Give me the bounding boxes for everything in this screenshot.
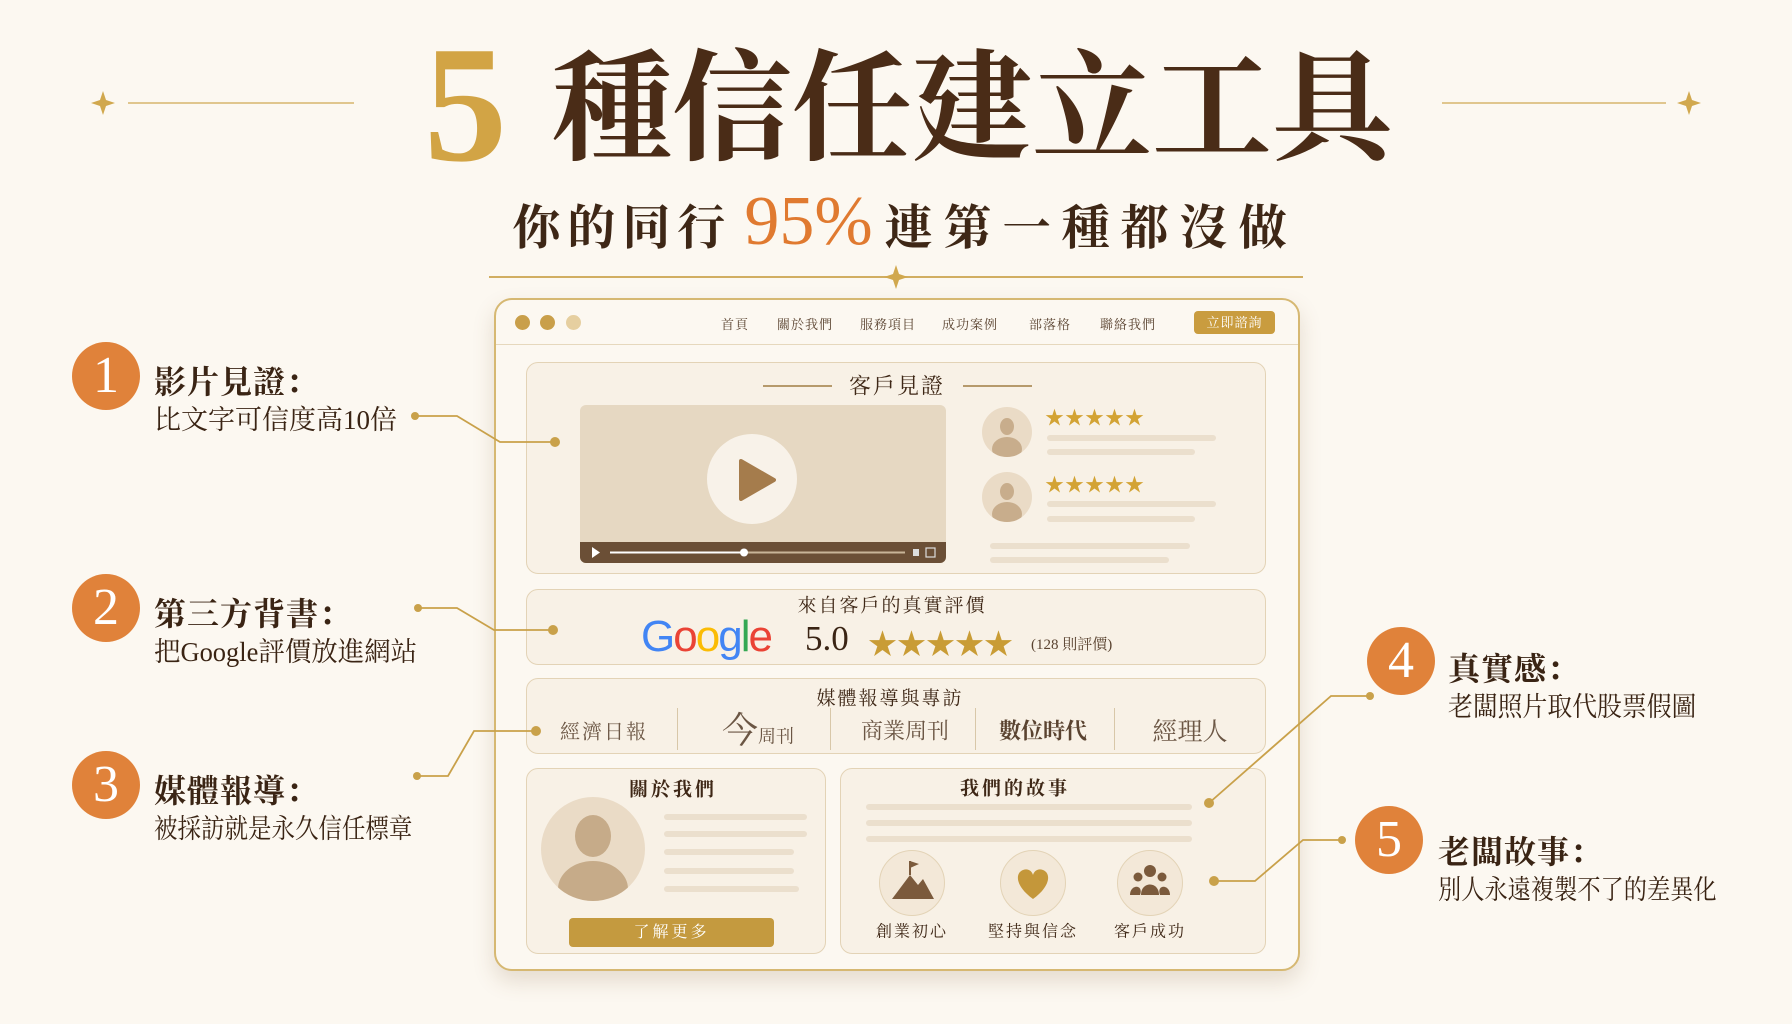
item 2: third-party endorsement: 把Google評價放進網站 [154, 637, 417, 667]
panel: google reviews: ★★★★★ [868, 629, 1013, 661]
panel: media: 經理人 [1152, 719, 1228, 746]
item 2: third-party endorsement [72, 574, 417, 667]
panel: google reviews [526, 589, 1266, 665]
nav bar [496, 300, 1298, 345]
panel: media: 媒體報導與專訪 [816, 688, 964, 710]
item 3: media coverage: 媒體報導： [154, 773, 319, 809]
button [569, 918, 774, 947]
button: 了解更多 [633, 924, 710, 941]
panel: about us [526, 768, 826, 954]
item 2: third-party endorsement: 2 [93, 579, 119, 636]
subtitle: 你的同行 95% 連第一種都沒做 [512, 183, 1298, 260]
item 2: third-party endorsement: 第三方背書： [154, 596, 352, 632]
panel: about us: 關於我們 [629, 780, 717, 800]
nav links [721, 317, 1156, 332]
panel: video testimonials [526, 362, 1266, 574]
icon: heart [1000, 850, 1066, 916]
video player [580, 405, 946, 563]
heading: 客戶見證 [849, 374, 945, 398]
panel: our story: 我們的故事 [960, 778, 1070, 800]
panel: media: 數位時代 [999, 718, 1087, 744]
item 5: founder story: 老闆故事： [1438, 834, 1603, 870]
nav links: 部落格 [1029, 317, 1071, 332]
item 5: founder story [1355, 806, 1717, 905]
nav button [1194, 311, 1275, 334]
panel: google reviews: (128 則評價) [1031, 637, 1112, 653]
nav links: 服務項目 [860, 317, 916, 332]
item 1: video testimonials: 1 [93, 347, 119, 404]
item 4: authenticity: 老闆照片取代股票假圖 [1448, 692, 1696, 722]
item 4: authenticity: 4 [1388, 632, 1414, 689]
panel: our story: 堅持與信念 [988, 924, 1078, 940]
panel: media [526, 678, 1266, 754]
item 3: media coverage [72, 751, 412, 844]
nav links: 聯絡我們 [1100, 317, 1156, 332]
panel: google reviews: 5.0 [805, 619, 849, 658]
item 1: video testimonials: 影片見證： [154, 364, 319, 400]
nav links: 成功案例 [942, 317, 998, 332]
item 5: founder story: 5 [1376, 811, 1402, 868]
browser mockup [494, 298, 1300, 971]
nav button: 立即諮詢 [1206, 315, 1262, 330]
item 5: founder story: 別人永遠複製不了的差異化 [1438, 875, 1717, 905]
panel: our story [840, 768, 1266, 954]
panel: video testimonials: ★★★★★ [1045, 475, 1145, 496]
item 4: authenticity [1367, 627, 1696, 722]
nav links: 首頁 [721, 317, 749, 332]
panel: media: 商業周刊 [861, 718, 949, 744]
panel: media: 經濟日報 [560, 722, 648, 744]
review 1 [982, 407, 1032, 457]
nav links: 關於我們 [777, 317, 833, 332]
icon: mountain flag [879, 850, 945, 916]
avatar [541, 797, 645, 901]
item 1: video testimonials: 比文字可信度高10倍 [154, 405, 397, 435]
panel: google reviews: 來自客戶的真實評價 [797, 596, 987, 616]
google logo: Google [641, 612, 771, 661]
panel: our story: 創業初心 [876, 924, 948, 940]
item 1: video testimonials [72, 342, 397, 435]
panel: media: 今周刊 [722, 710, 794, 750]
panel: our story: 客戶成功 [1114, 924, 1186, 940]
panel: video testimonials: ★★★★★ [1045, 408, 1145, 429]
item 4: authenticity: 真實感： [1448, 651, 1580, 687]
item 3: media coverage: 3 [93, 756, 119, 813]
title decorative lines [91, 91, 1701, 289]
review 2 [982, 472, 1032, 522]
item 3: media coverage: 被採訪就是永久信任標章 [154, 814, 412, 844]
icon: people [1117, 850, 1183, 916]
title: 5 種信任建立工具 [424, 12, 1392, 196]
